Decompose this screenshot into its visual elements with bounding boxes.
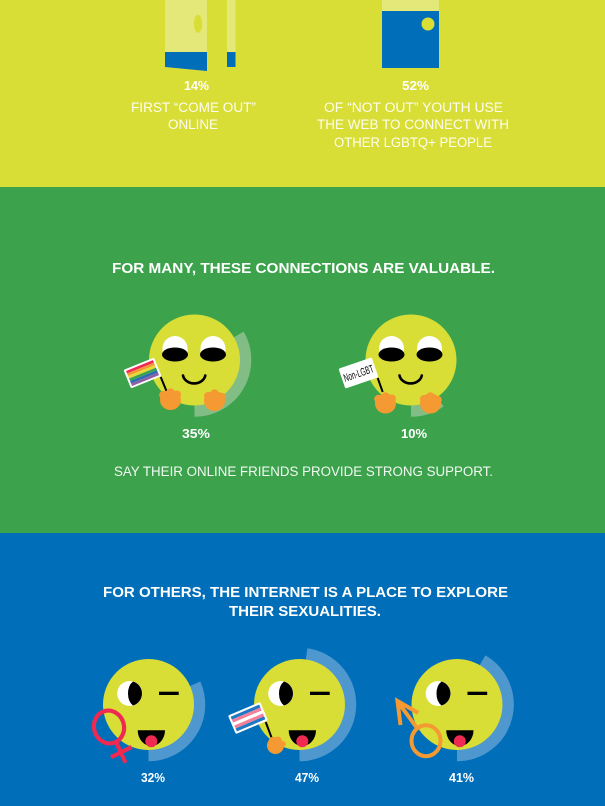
icon: open door [165, 0, 236, 71]
icon: male symbol [398, 701, 440, 756]
label: 35 percent: 35% [182, 426, 210, 441]
stat: first came out online: 14% [184, 78, 209, 93]
icon: trans flag [228, 702, 268, 734]
stat: not out youth connect on the web: 52% [402, 78, 429, 93]
icon: closed door [382, 0, 439, 68]
stat: first came out online [131, 78, 256, 132]
label: 10 percent: 10% [401, 426, 427, 441]
stat: not out youth connect on the web [317, 78, 509, 150]
chart: 32 percent female symbol smiley [90, 659, 199, 763]
icon: rainbow flag [123, 358, 162, 388]
label: 41 percent: 41% [449, 770, 474, 785]
heading: explore sexualities [103, 585, 508, 620]
panel: yellow online stats [0, 0, 605, 187]
icon: right hand [420, 392, 442, 414]
icon: right hand [204, 389, 226, 411]
panel: green connections [0, 187, 605, 533]
stat: not out youth connect on the web: THE WEB TO CONNECT WITH [317, 117, 509, 132]
icon: left hand [159, 388, 181, 410]
panel: blue exploring sexualities [0, 533, 605, 806]
stat: not out youth connect on the web: OF “NOT OUT” YOUTH USE [324, 100, 503, 115]
icon: left hand [374, 392, 396, 414]
stat: first came out online: FIRST “COME OUT” [131, 100, 256, 115]
heading: explore sexualities: FOR OTHERS, THE INTERNET IS A PLACE TO EXPLORE [103, 585, 508, 601]
stat: not out youth connect on the web: OTHER LGBTQ+ PEOPLE [334, 135, 492, 150]
icon: Non-LGBT sign: Non-LGBT [342, 363, 376, 385]
label: 32 percent: 32% [141, 770, 165, 785]
chart: 10 percent Non-LGBT sign smiley [339, 314, 456, 414]
chart: 41 percent male symbol smiley [398, 659, 508, 756]
icon: hand [267, 736, 286, 754]
heading: explore sexualities: THEIR SEXUALITIES. [229, 604, 381, 620]
icon: female symbol [90, 707, 132, 763]
text: online friends support: SAY THEIR ONLINE FRIENDS PROVIDE STRONG SUPPORT. [114, 464, 493, 479]
chart: 47 percent trans flag smiley [228, 654, 350, 756]
stat: first came out online: ONLINE [168, 117, 218, 132]
heading: connections are valuable: FOR MANY, THESE CONNECTIONS ARE VALUABLE. [112, 261, 495, 277]
chart: 35 percent LGBT flag smiley [123, 314, 246, 411]
label: 47 percent: 47% [295, 770, 319, 785]
